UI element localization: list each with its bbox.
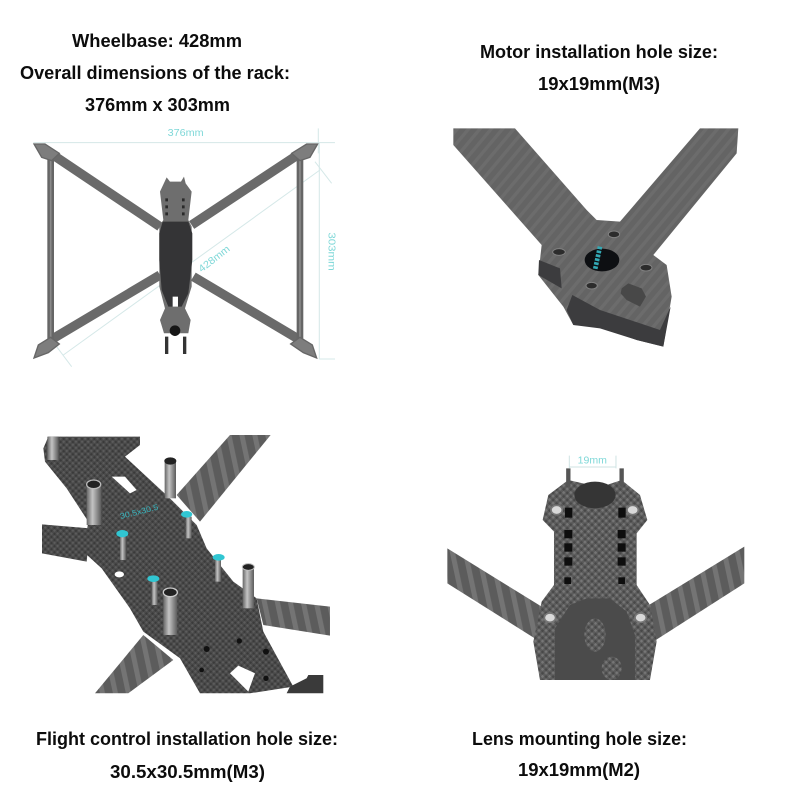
camera opening xyxy=(574,482,616,508)
heading: motor installation hole size: Motor installation hole size: xyxy=(480,42,718,62)
mount side wall xyxy=(538,260,671,347)
heading: wheelbase and overall dimensions: Overall dimensions of the rack: xyxy=(20,63,290,83)
cyan-tipped mounting pins xyxy=(116,511,225,605)
front plate xyxy=(533,480,657,680)
dimension: wheelbase 428mm xyxy=(57,162,332,367)
center body xyxy=(159,177,192,354)
motor shaft hole with cyan mark xyxy=(585,247,619,271)
dimension: height 303mm: 303mm xyxy=(325,232,336,271)
caption: flight control installation hole size xyxy=(36,729,338,782)
dark top plate xyxy=(555,598,635,680)
caption: lens mounting hole size: Lens mounting hole size: xyxy=(472,729,687,749)
caption: flight control installation hole size: 30.5x30.5mm(M3) xyxy=(110,762,265,782)
carbon arms and mount plate xyxy=(453,128,738,347)
corner standoff hardware xyxy=(287,675,323,693)
screw holes xyxy=(553,231,652,289)
motor mount pods xyxy=(34,144,318,358)
dimension label 30.5mm: 30.5x30.5 xyxy=(119,503,160,521)
screws xyxy=(544,505,646,622)
plate cutouts xyxy=(112,477,255,692)
heading: motor installation hole size xyxy=(480,42,718,94)
main carbon plate xyxy=(43,437,293,693)
caption: lens mounting hole size: 19x19mm(M2) xyxy=(518,760,640,780)
heading: wheelbase and overall dimensions xyxy=(20,31,290,115)
plate texture marks xyxy=(584,618,622,680)
photo: flight control mount close-up xyxy=(42,435,330,693)
slots xyxy=(564,508,626,584)
caption: lens mounting hole size xyxy=(472,729,687,780)
photo: motor mount arm close-up xyxy=(453,128,738,347)
lens mount posts xyxy=(568,468,622,487)
heading: wheelbase and overall dimensions: Wheelbase: 428mm xyxy=(72,31,242,51)
diagram: frame top view with dimensions xyxy=(33,128,336,367)
dimension: 19mm: 19mm xyxy=(578,455,607,466)
frame arms and struts xyxy=(51,153,300,340)
carbon arms xyxy=(42,435,330,693)
dimension: width 376mm: 376mm xyxy=(168,128,204,139)
dimension: width 376mm xyxy=(33,128,335,153)
oval cutout xyxy=(621,283,646,307)
standoffs xyxy=(47,437,254,635)
caption: flight control installation hole size: Flight control installation hole size: xyxy=(36,729,338,749)
dimension: wheelbase 428mm: 428mm xyxy=(197,244,232,275)
heading: motor installation hole size: 19x19mm(M3) xyxy=(538,74,660,94)
dimension: 19mm xyxy=(569,455,616,468)
carbon arms xyxy=(447,547,744,642)
heading: wheelbase and overall dimensions: 376mm x 303mm xyxy=(85,95,230,115)
photo: lens mount close-up xyxy=(447,455,744,680)
dimension: height 303mm xyxy=(319,143,336,359)
